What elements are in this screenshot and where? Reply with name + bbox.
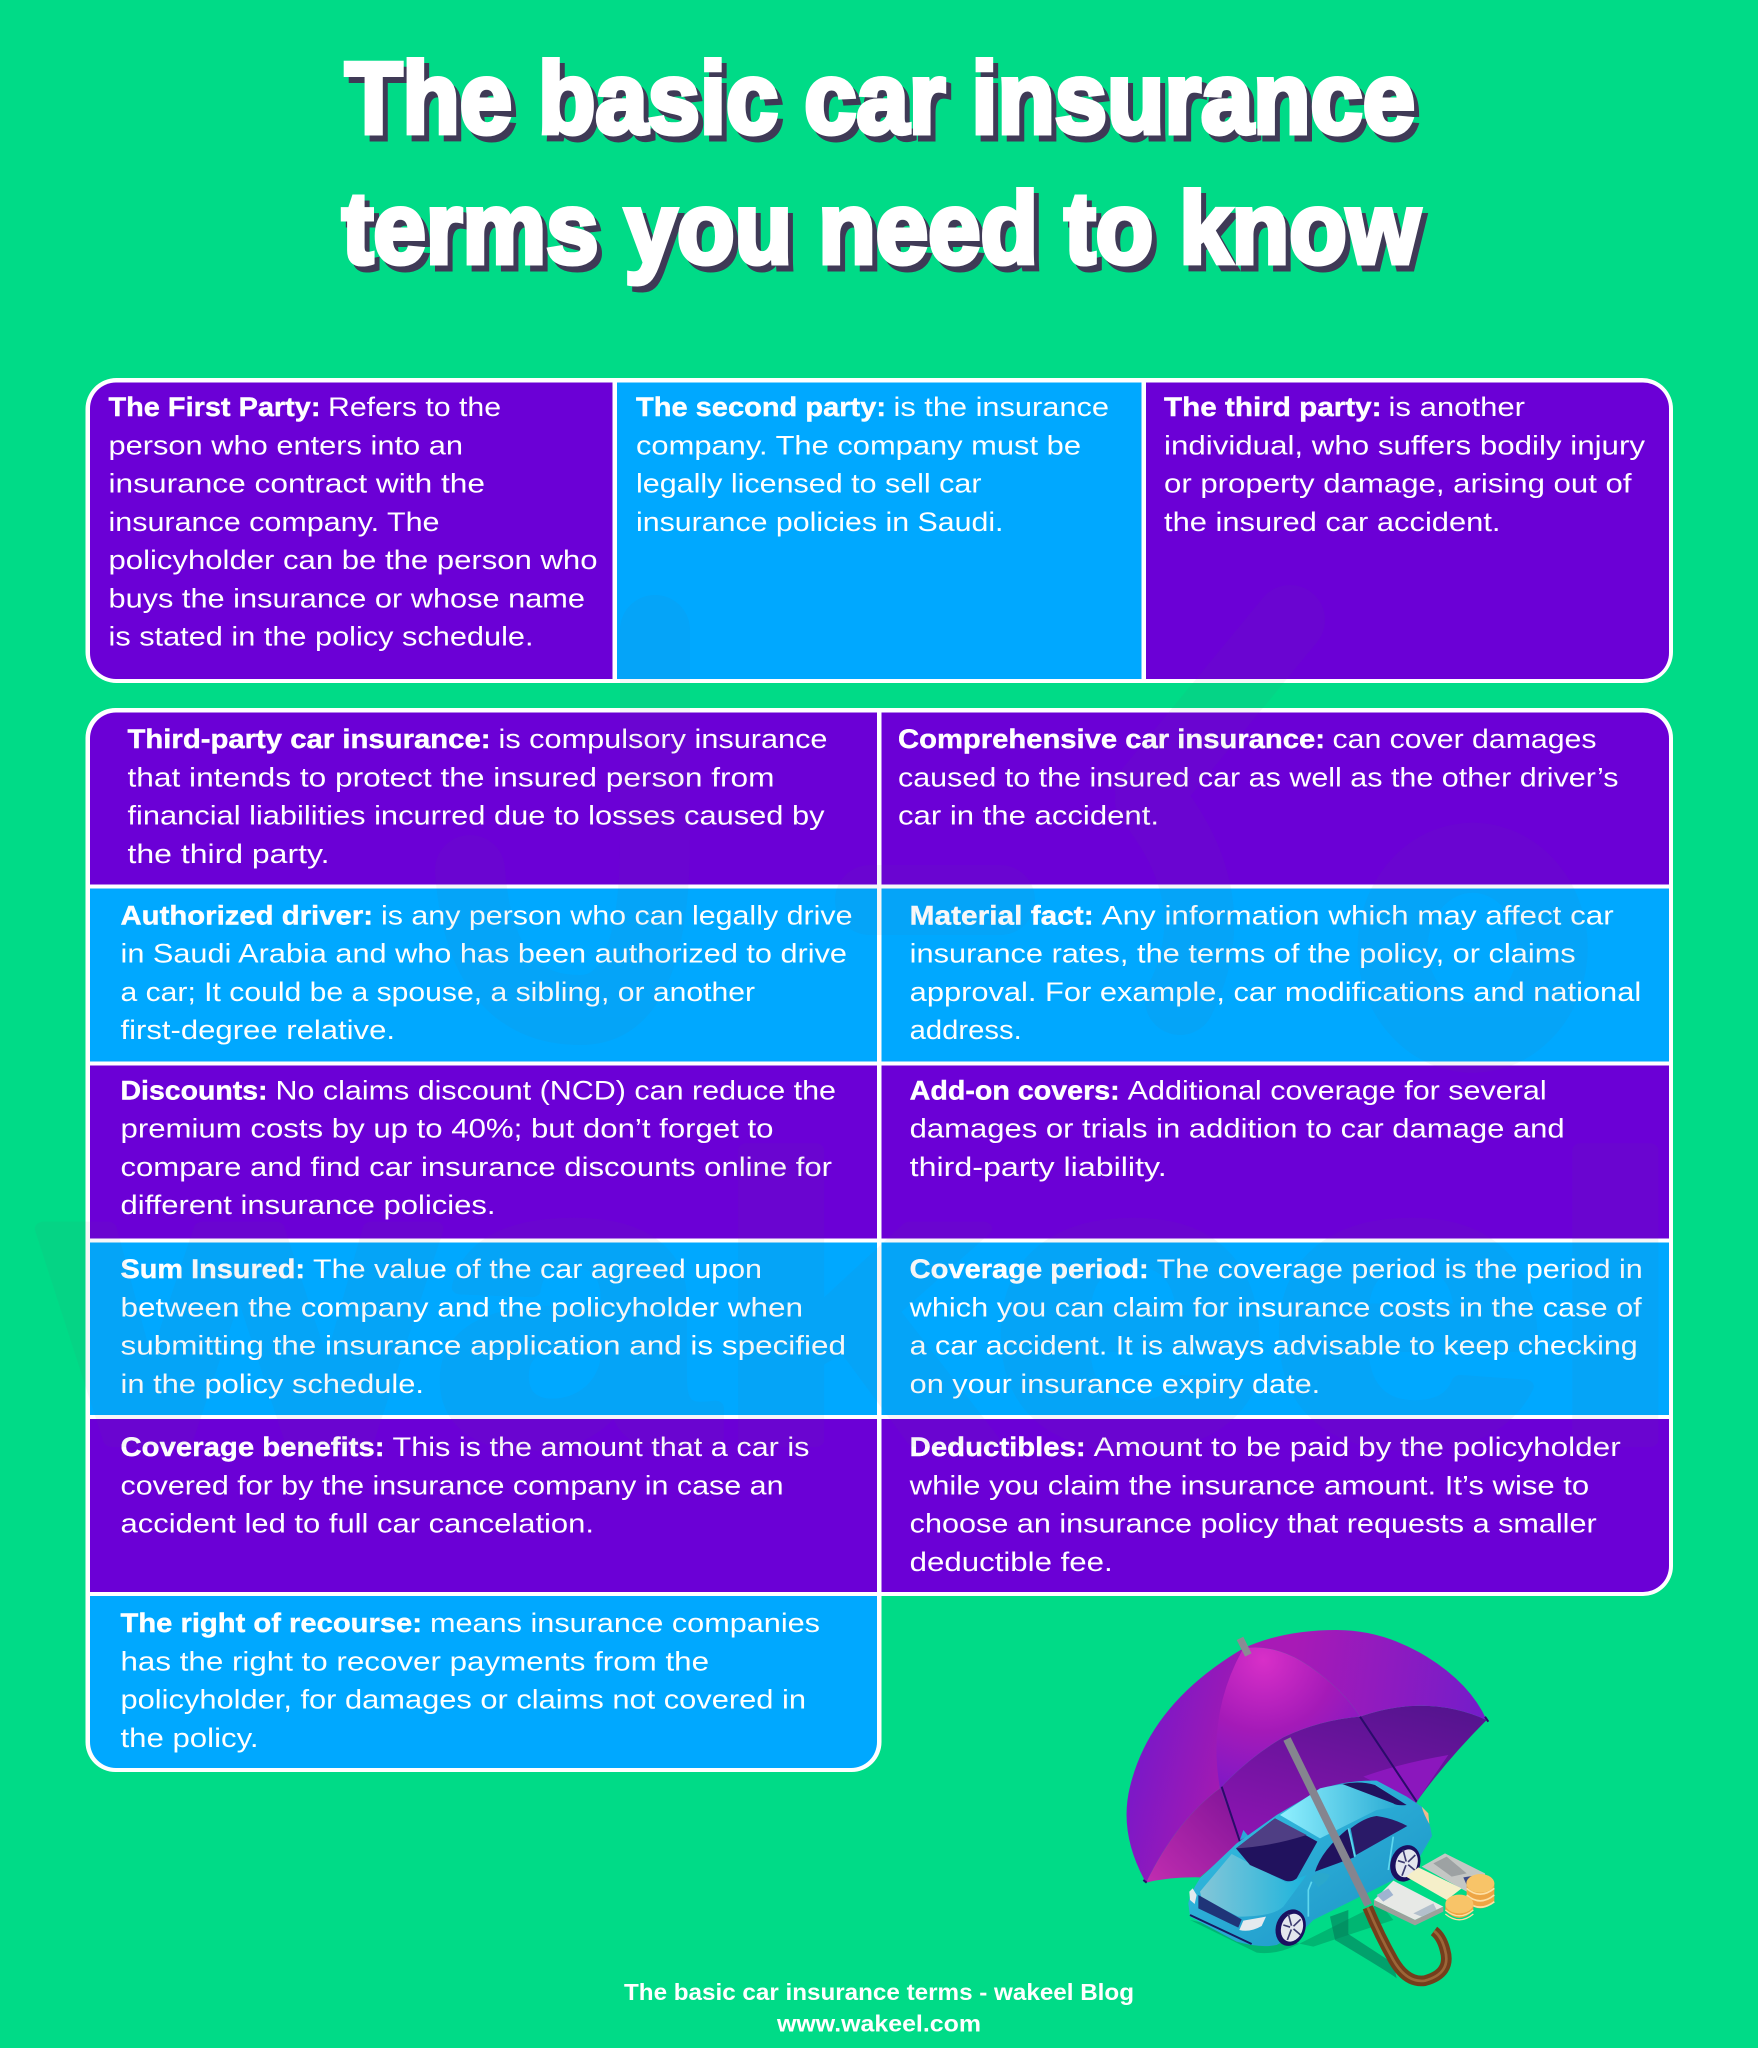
cell: coverage benefits [90,1419,877,1592]
cell: add-on covers [882,1066,1669,1238]
cell: add-on covers: third-party liability. [910,1152,1167,1182]
cell: add-on covers: Add-on covers: [910,1075,1120,1105]
cell: authorized driver [90,888,877,1062]
cell: material fact: approval. For example, car modifications and national [910,977,1641,1007]
cell: discounts: No claims discount (NCD) can reduce the [276,1075,836,1105]
icon: banknote stacks and coins [1374,1853,1494,1925]
cell: the second party: company. The company must be [636,430,1081,460]
cell: the right of recourse: means insurance companies [430,1608,820,1638]
cell: material fact: insurance rates, the terms of the policy, or claims [910,939,1576,969]
cell: authorized driver: in Saudi Arabia and who has been authorized to drive [120,939,847,969]
cell: the second party: The second party: [636,392,886,422]
cell: deductibles: choose an insurance policy that requests a smaller [910,1508,1597,1538]
cell: the right of recourse: policyholder, for damages or claims not covered in [120,1684,806,1714]
cell: sum insured: between the company and the policyholder when [120,1292,803,1322]
cell: the first party: buys the insurance or whose name [108,583,585,613]
cell: the third party: is another [1388,392,1525,422]
cell: material fact: Material fact: [910,900,1094,930]
cell: the first party: is stated in the policy schedule. [108,622,534,652]
illustration: car under umbrella with money [1127,1630,1494,1981]
cell: the right of recourse [90,1596,877,1768]
cell: the first party: insurance company. The [108,507,440,537]
cell: authorized driver: Authorized driver: [120,900,373,930]
cell: the right of recourse: has the right to recover payments from the [120,1646,709,1676]
cell: deductibles: Amount to be paid by the policyholder [1094,1432,1621,1462]
cell: third-party car insurance: that intends to protect the insured person from [128,762,774,792]
watermark: wakeel logo: wakeel [37,1078,1685,1525]
panel: the three parties [86,378,1673,683]
title: terms you need to know [347,179,1425,291]
title [342,43,1425,291]
cell: deductibles: while you claim the insurance amount. It’s wise to [909,1470,1589,1500]
cell: the first party: person who enters into an [108,430,463,460]
cell: the third party: The third party: [1164,392,1382,422]
cell: the right of recourse: The right of recourse: [120,1608,422,1638]
title: The basic car insurance [345,43,1415,155]
cell: coverage benefits: Coverage benefits: [120,1432,384,1462]
cell: third-party car insurance [90,712,877,884]
cell: add-on covers: damages or trials in addition to car damage and [910,1114,1565,1144]
cell: coverage period: Coverage period: [910,1254,1149,1284]
cell: the second party: insurance policies in Saudi. [636,507,1004,537]
cell: the second party: legally licensed to sell car [636,468,982,498]
icon: ground shadows [1190,1903,1397,1978]
cell: third-party car insurance: is compulsory insurance [498,724,828,754]
cell: sum insured: in the policy schedule. [120,1369,424,1399]
cell: discounts: compare and find car insurance discounts online for [120,1152,832,1182]
cell: the first party [90,382,612,679]
cell: comprehensive car insurance: can cover damages [1332,724,1596,754]
cell: sum insured: Sum Insured: [120,1254,305,1284]
cell: material fact: Any information which may affect car [1102,900,1614,930]
cell: the first party: policyholder can be the person who [108,545,598,575]
cell: discounts [90,1066,877,1238]
cell: the third party: the insured car accident. [1164,507,1500,537]
cell: sum insured: submitting the insurance application and is specified [120,1330,846,1360]
cell: material fact: address. [910,1015,1022,1045]
icon: rear wheel [1385,1841,1425,1886]
cell: coverage benefits: This is the amount that a car is [392,1432,810,1462]
cell: comprehensive car insurance [882,712,1669,884]
cell: discounts: premium costs by up to 40%; but don’t forget to [120,1114,774,1144]
watermark: wakeel logo [37,620,1685,1525]
cell: deductibles: Deductibles: [910,1432,1086,1462]
cell: discounts: different insurance policies. [120,1190,496,1220]
cell: comprehensive car insurance: Comprehensive car insurance: [898,724,1325,754]
panel: insurance terms table [86,708,1673,1772]
cell: third-party car insurance: Third-party car insurance: [128,724,490,754]
cell: sum insured [90,1242,877,1415]
cell: authorized driver: a car; It could be a spouse, a sibling, or another [120,977,755,1007]
cell: coverage benefits: covered for by the insurance company in case an [120,1470,784,1500]
cell: third-party car insurance: the third party. [128,839,330,869]
title: The basic car insurance [350,49,1420,161]
cell: authorized driver: first-degree relative. [120,1015,395,1045]
icon: blue car [1188,1781,1432,1950]
footer caption: www.wakeel.com [776,2010,981,2036]
cell: deductibles [882,1419,1669,1592]
cell: the first party: Refers to the [328,392,501,422]
cell: coverage benefits: accident led to full car cancelation. [120,1508,594,1538]
footer caption [624,1979,1134,2036]
cell: comprehensive car insurance: car in the accident. [898,800,1159,830]
cell: the first party: The First Party: [108,392,320,422]
cell: the second party: is the insurance [894,392,1109,422]
cell: sum insured: The value of the car agreed upon [313,1254,762,1284]
cell: the third party: or property damage, arising out of [1164,468,1632,498]
icon: umbrella pole and handle [1287,1739,1446,1981]
cell: discounts: Discounts: [120,1075,268,1105]
cell: coverage period: which you can claim for insurance costs in the case of [909,1292,1642,1322]
cell: coverage period: The coverage period is the period in [1157,1254,1643,1284]
cell: coverage period: a car accident. It is always advisable to keep checking [910,1330,1638,1360]
cell: the first party: insurance contract with the [108,468,485,498]
icon: front wheel [1270,1905,1311,1950]
cell: coverage period: on your insurance expiry date. [910,1369,1320,1399]
cell: the third party [1146,382,1669,679]
cell: add-on covers: Additional coverage for several [1128,1075,1547,1105]
icon: umbrella canopy [1127,1630,1488,1883]
cell: material fact [882,888,1669,1062]
cell: the right of recourse: the policy. [120,1723,258,1753]
cell: comprehensive car insurance: caused to the insured car as well as the other driver’s [898,762,1618,792]
title: terms you need to know [342,173,1420,285]
cell: authorized driver: is any person who can legally drive [381,900,852,930]
cell: coverage period [882,1242,1669,1415]
cell: deductibles: deductible fee. [910,1547,1113,1577]
cell: third-party car insurance: financial liabilities incurred due to losses caused by [128,800,825,830]
cell: the third party: individual, who suffers bodily injury [1164,430,1646,460]
footer caption: The basic car insurance terms - wakeel Blog [624,1979,1134,2005]
cell: the second party [617,382,1142,679]
